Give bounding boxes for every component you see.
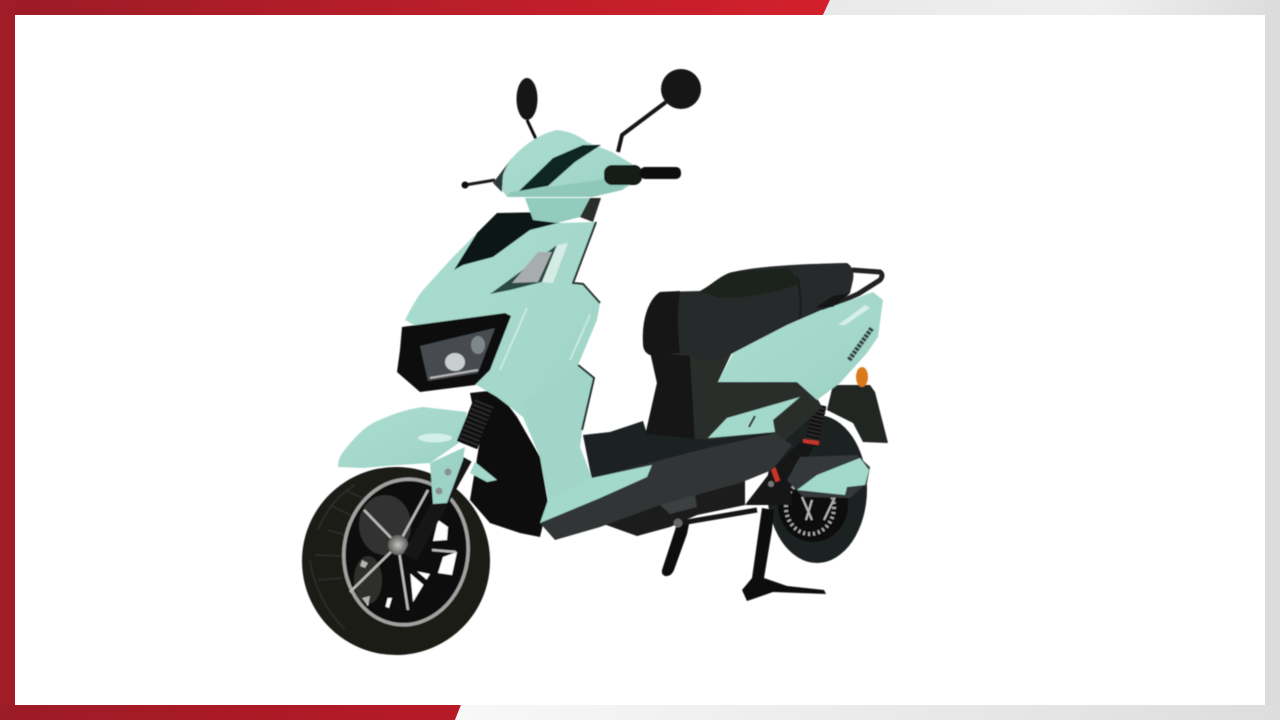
rear body panel	[718, 292, 883, 400]
front body panel	[405, 212, 600, 500]
left mirror	[516, 78, 538, 139]
body crease highlights	[500, 308, 590, 370]
hub	[388, 535, 408, 555]
panel edge shadow	[573, 222, 600, 430]
seat	[643, 263, 853, 360]
side stand	[662, 524, 689, 576]
front fender	[338, 407, 467, 468]
rear shock absorber	[803, 405, 820, 445]
border: bottom grey band	[455, 705, 1280, 720]
spoke gaps	[360, 520, 457, 608]
right grip and switch	[604, 165, 681, 185]
under-seat panel	[645, 350, 822, 450]
grab rail	[822, 270, 882, 310]
floorboard	[583, 421, 775, 480]
brake disc	[359, 495, 411, 555]
tyre	[302, 467, 490, 655]
scooter	[302, 69, 888, 655]
windshield	[454, 212, 558, 270]
cowl stripe	[519, 145, 601, 191]
left cowl edge	[493, 158, 512, 192]
rear mudguard	[827, 385, 888, 443]
rear fender tip	[470, 462, 497, 482]
handlebar cowl	[502, 130, 638, 197]
neck	[525, 198, 590, 223]
border: right grey band	[1265, 0, 1280, 720]
lower mint strip	[540, 465, 652, 523]
front wheel	[302, 467, 490, 655]
border: bottom red band	[0, 705, 461, 720]
side indicator	[490, 243, 568, 294]
border: top grey band	[823, 0, 1280, 15]
kick lever	[674, 510, 757, 528]
bracket plate	[660, 495, 697, 514]
border: left red band	[0, 0, 15, 720]
rear wheel	[767, 415, 867, 563]
rear hugger	[787, 455, 870, 498]
fender bracket	[430, 447, 465, 504]
lower panel shade	[523, 367, 594, 500]
fork boot	[467, 403, 484, 445]
centre stand	[742, 508, 826, 601]
brand mark	[849, 328, 872, 360]
front fork lower	[410, 458, 465, 557]
headlight housing	[397, 313, 511, 392]
headlight lens	[420, 328, 495, 381]
rear panel highlights	[838, 305, 870, 325]
dark inner front	[470, 390, 548, 537]
amber reflector	[856, 367, 868, 387]
lower body dark	[540, 433, 792, 540]
rim	[334, 471, 478, 633]
cowl lower shade	[507, 170, 632, 197]
swingarm and suspension link	[745, 442, 815, 505]
neck shadow	[580, 198, 601, 222]
right mirror	[618, 69, 701, 152]
border: top red band	[0, 0, 830, 15]
engine underside	[598, 480, 745, 536]
spokes	[350, 490, 456, 610]
fender highlight	[418, 434, 452, 442]
left handlebar end	[462, 180, 495, 188]
small side panel	[708, 397, 800, 438]
